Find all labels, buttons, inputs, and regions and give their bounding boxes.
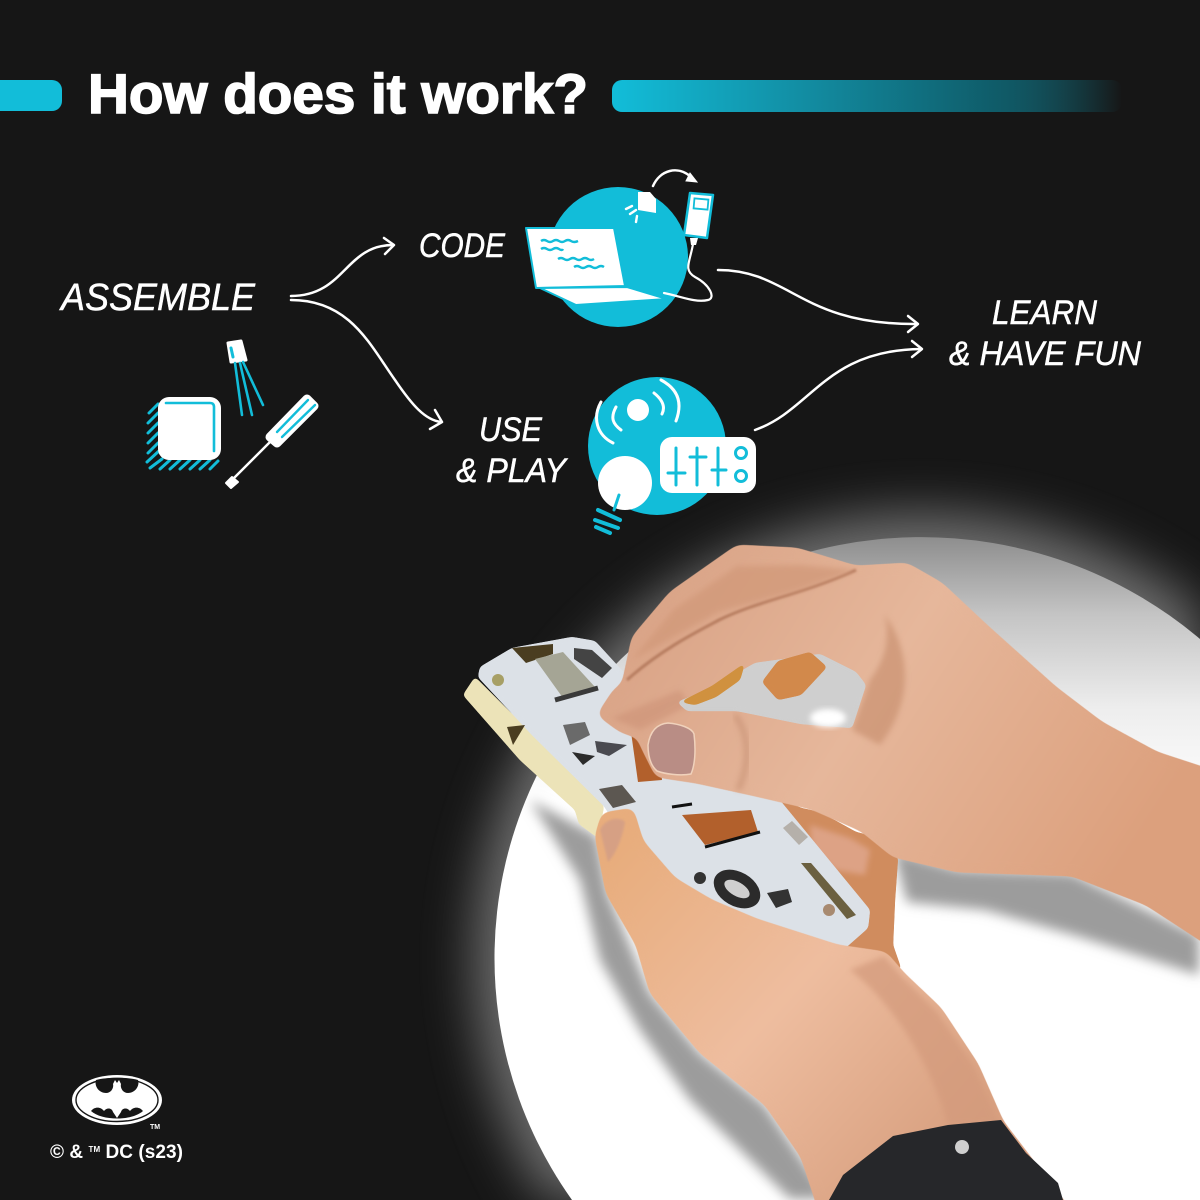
antenna bbox=[512, 644, 553, 663]
chip specks bbox=[563, 722, 590, 745]
enclosure highlight bbox=[166, 403, 214, 451]
spark lines bbox=[626, 206, 637, 222]
wifi module bbox=[535, 652, 595, 698]
device bbox=[684, 193, 713, 245]
label: learn and have fun: LEARN bbox=[992, 294, 1097, 332]
label: use and play bbox=[456, 411, 568, 490]
label: learn and have fun bbox=[949, 294, 1141, 373]
trademark: TM bbox=[150, 1124, 160, 1131]
board mount hole bbox=[492, 674, 504, 686]
enclosure side bbox=[463, 677, 604, 838]
ribbon connector lower bbox=[682, 810, 758, 845]
index finger crease bbox=[627, 570, 856, 680]
label: assemble: ASSEMBLE bbox=[59, 277, 256, 319]
label: use and play: USE bbox=[479, 411, 542, 449]
module pins bbox=[555, 688, 598, 700]
label: code: CODE bbox=[419, 227, 505, 265]
copyright line: © & bbox=[50, 1142, 83, 1163]
dark chip bbox=[572, 752, 595, 765]
wristband bbox=[829, 1120, 1063, 1200]
title accent bar right bbox=[612, 80, 1122, 112]
curled finger tip middle bbox=[680, 663, 745, 705]
cable bbox=[664, 244, 712, 301]
arrow: assemble to use and play bbox=[291, 300, 442, 429]
index fingertip shade bbox=[612, 690, 690, 730]
transfer arrow bbox=[653, 170, 697, 186]
slot bbox=[801, 863, 856, 919]
spotlight circle bbox=[474, 512, 1200, 1200]
upper hand bbox=[597, 545, 1200, 950]
circuit board bbox=[478, 637, 870, 950]
teal circle bbox=[588, 377, 726, 515]
light bulb bbox=[595, 456, 652, 533]
usb-c socket bbox=[595, 741, 627, 756]
batman logo bbox=[72, 1075, 162, 1131]
icon: code laptop and device bbox=[526, 170, 713, 327]
usb port bbox=[599, 785, 636, 808]
icon: use and play bbox=[588, 377, 756, 533]
icon: screwdriver bbox=[226, 399, 315, 488]
icon: wire connector bbox=[228, 341, 263, 415]
cast shadows bbox=[530, 800, 1199, 1199]
icon: enclosure hatch bbox=[147, 404, 218, 469]
lower hand with wrist bbox=[595, 808, 1075, 1200]
icon: assemble parts bbox=[147, 341, 315, 488]
document bbox=[638, 192, 656, 213]
arrow: assemble to code bbox=[291, 238, 394, 296]
middle finger shade bbox=[632, 565, 856, 660]
arrow: code to learn bbox=[718, 270, 918, 332]
palm shade bbox=[852, 615, 905, 745]
wristband sensor bbox=[955, 1140, 969, 1154]
thumb nail bbox=[648, 723, 695, 775]
gap highlight bbox=[810, 709, 846, 727]
curled finger tip ring bbox=[762, 652, 827, 700]
dark chip lower bbox=[767, 889, 792, 908]
sound waves bbox=[597, 380, 679, 443]
copyright line: TM bbox=[89, 1145, 100, 1154]
ribbon connector top bbox=[631, 722, 662, 782]
side shading bbox=[850, 956, 999, 1125]
ribbon clips bbox=[672, 804, 760, 847]
right lower fingers bbox=[775, 795, 902, 971]
arrow: use and play to learn bbox=[755, 341, 922, 430]
thumb knuckle shade bbox=[735, 715, 747, 790]
finger highlight bbox=[810, 825, 870, 875]
laptop bbox=[526, 228, 667, 305]
title accent bar left bbox=[0, 80, 62, 111]
title: How does it work? bbox=[88, 62, 588, 125]
label: learn and have fun: & HAVE FUN bbox=[949, 335, 1141, 373]
sound source bbox=[627, 399, 649, 421]
icon: enclosure bbox=[158, 397, 221, 460]
gap between fingers bbox=[677, 654, 866, 728]
label: use and play: & PLAY bbox=[456, 452, 568, 490]
control panel bbox=[660, 437, 756, 493]
small mark bbox=[823, 904, 835, 916]
copyright line: DC (s23) bbox=[100, 1142, 183, 1163]
teal circle bbox=[548, 187, 688, 327]
photo: hands holding board bbox=[463, 545, 1200, 1200]
metal switch bbox=[783, 821, 808, 845]
enclosure port bbox=[507, 725, 525, 745]
board cutout bbox=[574, 648, 612, 678]
bat badge bbox=[694, 862, 767, 916]
thumb tip detail bbox=[600, 819, 625, 862]
